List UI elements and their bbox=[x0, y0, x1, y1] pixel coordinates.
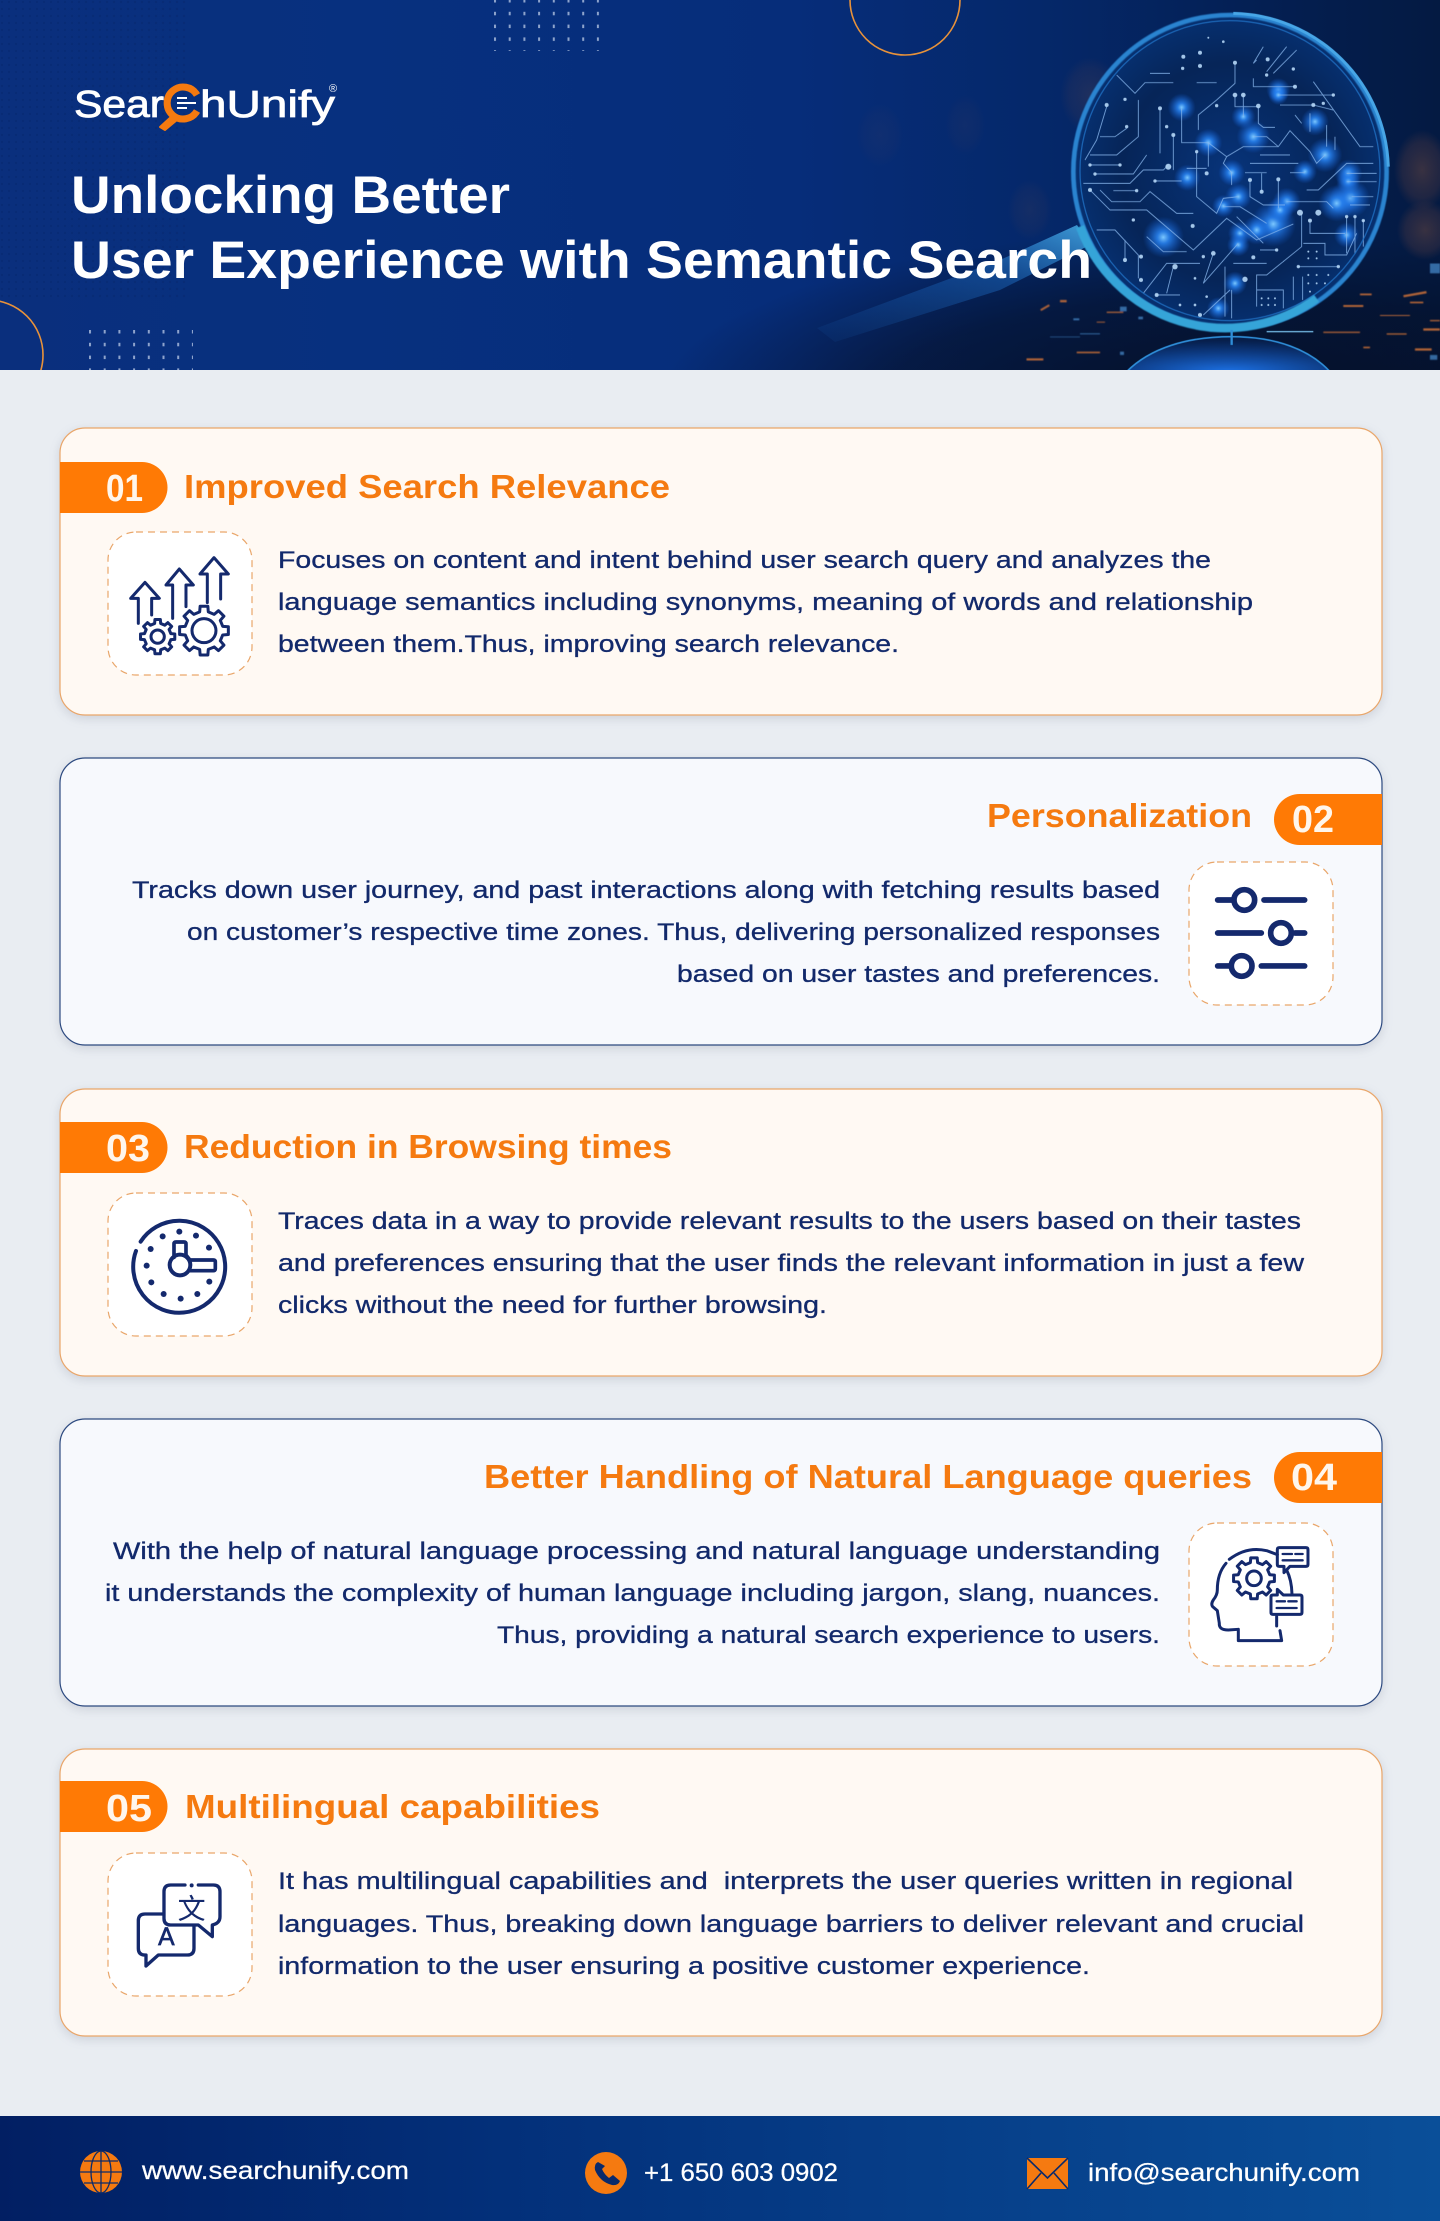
contact: email: info@searchunify.com bbox=[1088, 2159, 1360, 2187]
panel: 03 reduction in browsing times bbox=[60, 1089, 1382, 1376]
magnifying glass illustration bbox=[817, 13, 1440, 372]
logo: SearchUnify: Sear bbox=[74, 84, 164, 126]
description text: language semantics including synonyms, meaning of words and relationship bbox=[278, 589, 1253, 616]
panel: 04 natural language queries bbox=[60, 1419, 1382, 1706]
heading: Better Handling of Natural Language queries bbox=[484, 1458, 1252, 1495]
description text: and preferences ensuring that the user finds the relevant information in just a few bbox=[278, 1250, 1305, 1277]
icon: clock bbox=[108, 1193, 252, 1336]
description text: based on user tastes and preferences. bbox=[677, 961, 1160, 988]
number badge 03: 03 bbox=[106, 1128, 150, 1170]
heading: Personalization bbox=[987, 797, 1252, 834]
description text: Traces data in a way to provide relevant results to the users based on their tastes bbox=[278, 1208, 1301, 1235]
icon: sliders bbox=[1189, 862, 1333, 1005]
description text: on customer’s respective time zones. Thus, delivering personalized responses bbox=[187, 919, 1160, 946]
card background bbox=[60, 1419, 1382, 1706]
lens ring bbox=[1073, 13, 1388, 328]
description text: languages. Thus, breaking down language barriers to deliver relevant and crucial bbox=[278, 1911, 1304, 1938]
contact: phone bbox=[585, 2152, 838, 2194]
title: User Experience with Semantic Search bbox=[71, 231, 1092, 290]
description text bbox=[278, 547, 1253, 658]
panel: 05 multilingual capabilities bbox=[60, 1749, 1382, 2036]
panel: 01 improved search relevance bbox=[60, 428, 1382, 715]
description text bbox=[278, 1208, 1305, 1319]
description text: it understands the complexity of human language including jargon, slang, nuances. bbox=[105, 1580, 1160, 1607]
header banner bbox=[0, 0, 1440, 370]
number badge 04 bbox=[1274, 1452, 1382, 1503]
footer bar bbox=[0, 2116, 1440, 2221]
description text: With the help of natural language processing and natural language understanding bbox=[113, 1538, 1160, 1565]
logo: SearchUnify bbox=[74, 83, 337, 130]
logo: SearchUnify: hUnify bbox=[200, 84, 335, 126]
icon: phone bbox=[585, 2152, 627, 2194]
description text: information to the user ensuring a positive customer experience. bbox=[278, 1953, 1090, 1980]
circuit traces bbox=[1083, 47, 1377, 318]
icon: translation chat bubbles: 文 bbox=[178, 1887, 206, 1927]
city lights floor bbox=[1027, 263, 1440, 360]
logo: SearchUnify: ® bbox=[329, 83, 337, 95]
contact: website bbox=[80, 2151, 409, 2193]
magnifier handle bbox=[817, 225, 1090, 342]
number badge 03 bbox=[60, 1122, 168, 1173]
card background bbox=[60, 1749, 1382, 2036]
description text: clicks without the need for further browsing. bbox=[278, 1292, 827, 1319]
description text bbox=[105, 1538, 1160, 1649]
heading: Reduction in Browsing times bbox=[184, 1128, 672, 1165]
description text: It has multilingual capabilities and interprets the user queries written in regional bbox=[278, 1868, 1293, 1895]
icon: head with gear and chat bubbles bbox=[1189, 1523, 1333, 1666]
number badge 05: 05 bbox=[106, 1788, 152, 1830]
number badge 01 bbox=[60, 462, 168, 513]
panel: 02 personalization bbox=[60, 758, 1382, 1045]
icon: translation chat bubbles bbox=[108, 1853, 252, 1996]
icon: envelope bbox=[1027, 2158, 1068, 2189]
card background bbox=[60, 758, 1382, 1045]
description text: Tracks down user journey, and past interactions along with fetching results based bbox=[132, 877, 1160, 904]
number badge 02 bbox=[1274, 794, 1382, 845]
description text bbox=[278, 1868, 1304, 1980]
icon: globe bbox=[80, 2151, 122, 2193]
card background bbox=[60, 428, 1382, 715]
title bbox=[71, 166, 1092, 290]
contact: website: www.searchunify.com bbox=[141, 2157, 409, 2185]
lens bbox=[1075, 17, 1385, 327]
number badge 02: 02 bbox=[1292, 799, 1334, 841]
contact: phone: +1 650 603 0902 bbox=[644, 2159, 838, 2187]
description text: Focuses on content and intent behind user search query and analyzes the bbox=[278, 547, 1211, 574]
description text: Thus, providing a natural search experience to users. bbox=[497, 1622, 1160, 1649]
number badge 01: 01 bbox=[106, 468, 143, 510]
number badge 04: 04 bbox=[1291, 1457, 1337, 1499]
icon: arrows and gears bbox=[108, 532, 252, 675]
number badge 05 bbox=[60, 1781, 168, 1832]
title: Unlocking Better bbox=[71, 166, 510, 225]
contact: email bbox=[1027, 2158, 1360, 2189]
card background bbox=[60, 1089, 1382, 1376]
decoration: dot grids bbox=[89, 0, 602, 370]
description text bbox=[132, 877, 1160, 988]
lens glows bbox=[1143, 78, 1370, 320]
lens reflection bbox=[1127, 330, 1330, 372]
decoration: orange arcs bbox=[0, 0, 960, 410]
circuit nodes bbox=[1088, 37, 1365, 317]
logo mark: orange magnifier C bbox=[160, 87, 197, 130]
heading: Multilingual capabilities bbox=[185, 1788, 600, 1825]
icon: translation chat bubbles: A bbox=[158, 1924, 175, 1951]
description text: between them.Thus, improving search relevance. bbox=[278, 631, 899, 658]
heading: Improved Search Relevance bbox=[184, 468, 670, 505]
